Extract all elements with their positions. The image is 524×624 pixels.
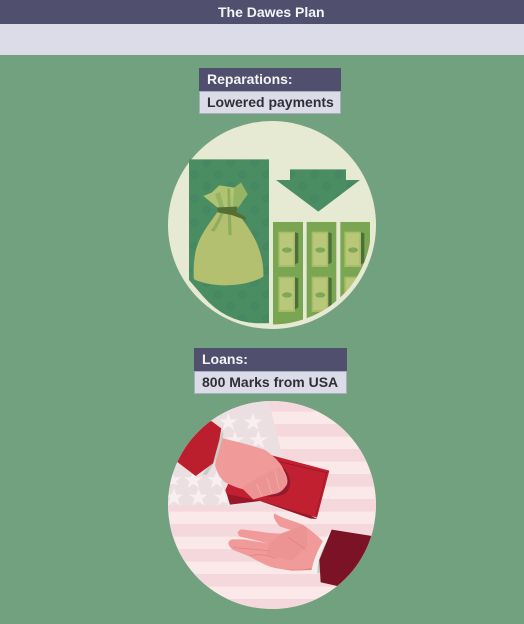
left sleeve [177, 421, 222, 476]
left cuff [203, 430, 223, 475]
title bar [0, 0, 524, 24]
finger shadow [267, 462, 290, 497]
hand [215, 438, 287, 499]
icon: money bag [194, 183, 263, 285]
title bar: The Dawes Plan [218, 4, 325, 20]
text: 800 marks from USA [194, 371, 347, 394]
money columns [273, 222, 370, 325]
striped flag background [163, 400, 380, 611]
banknote [225, 454, 329, 518]
panel: reparations label [199, 68, 341, 114]
banknotes underside [226, 491, 317, 519]
illustration: loans circle [163, 400, 380, 611]
heading: loans: Loans: [202, 351, 248, 367]
hand giving banknotes [167, 421, 329, 519]
illustration: reparations circle [168, 121, 376, 329]
right cuff [311, 530, 332, 573]
arrow: down [276, 169, 360, 212]
text: lowered payments: Lowered payments [207, 94, 334, 110]
heading: loans [194, 348, 347, 371]
panel: loans label [194, 348, 347, 394]
text: 800 marks from USA: 800 Marks from USA [202, 374, 338, 390]
receiving hand [228, 513, 380, 587]
right sleeve [319, 530, 372, 586]
empty subtitle band [0, 24, 524, 55]
text: lowered payments [199, 91, 341, 114]
money bag panel [189, 159, 269, 323]
heading: reparations: Reparations: [207, 71, 293, 87]
circle background [168, 121, 376, 329]
heading: reparations [199, 68, 341, 91]
flag canton with stars [168, 401, 282, 506]
